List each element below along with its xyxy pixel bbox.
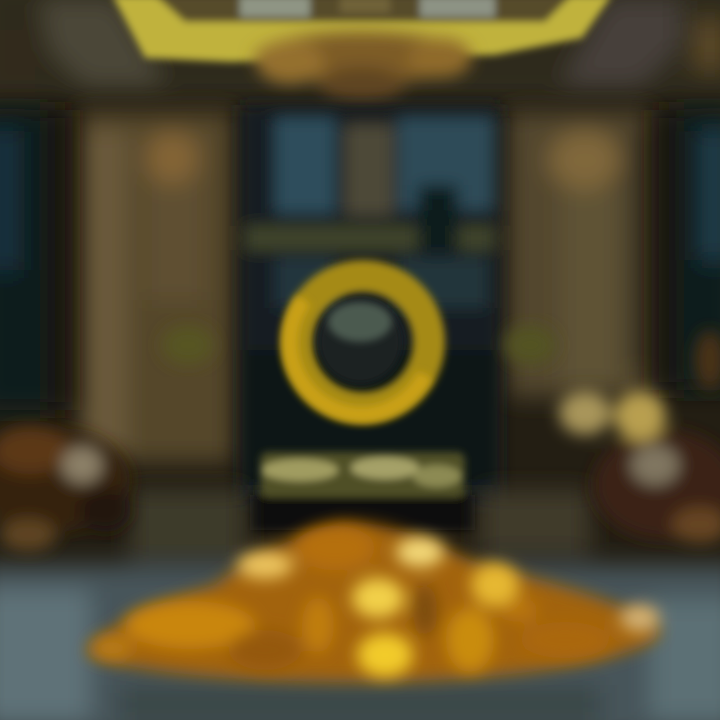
- ceiling light frame: [112, 0, 612, 62]
- gold pile: [85, 522, 662, 682]
- pile highlights: [92, 526, 660, 677]
- chandelier: [254, 32, 472, 103]
- book stack: [250, 452, 475, 530]
- emblem: golden ring: [290, 276, 429, 414]
- central window: [240, 105, 500, 505]
- right armchair and lamps: [559, 330, 720, 543]
- left armchair: [0, 426, 131, 551]
- wall sconces: [162, 325, 556, 365]
- right column wall: [508, 112, 653, 397]
- left column wall: [78, 112, 233, 462]
- pile base: [85, 522, 662, 682]
- ceiling: [0, 0, 720, 100]
- side windows: [0, 110, 720, 410]
- floor: [0, 490, 720, 720]
